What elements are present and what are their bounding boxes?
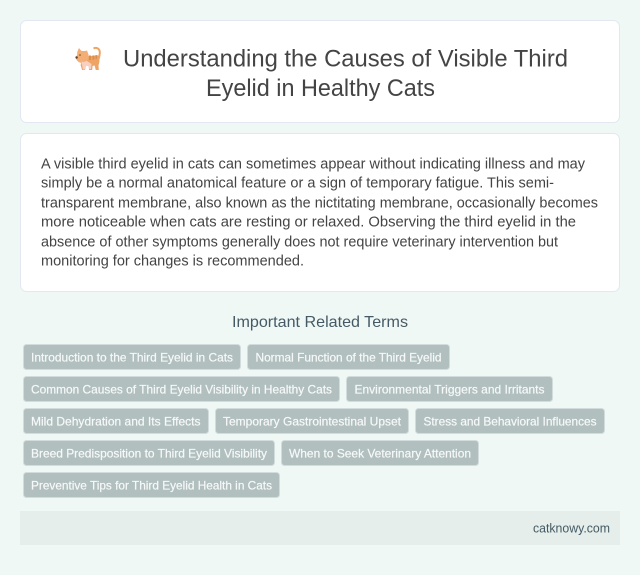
description paragraph: A visible third eyelid in cats can sometimes appear without indicating illness and may [41, 156, 586, 172]
tag: common causes: Common Causes of Third Eyelid Visibility in Healthy Cats [31, 383, 332, 397]
icon: orange cat [75, 48, 100, 70]
title text [123, 46, 568, 102]
description paragraph: simply be a normal anatomical feature or a sign of temporary fatigue. This semi- [41, 176, 554, 192]
tag: veterinary attention: When to Seek Veterinary Attention [289, 447, 471, 461]
heading: important related terms: Important Related Terms [232, 314, 408, 331]
panel: description card [20, 134, 620, 292]
tag: veterinary attention [282, 440, 478, 466]
panel: related term tags [24, 344, 604, 498]
description paragraph: monitoring for changes is recommended. [41, 254, 304, 270]
tag: breed predisposition: Breed Predisposition to Third Eyelid Visibility [31, 447, 267, 461]
tag: normal function: Normal Function of the Third Eyelid [256, 351, 442, 365]
tag: common causes [24, 376, 340, 402]
tag: breed predisposition [24, 440, 274, 466]
tag: normal function [248, 344, 450, 370]
description paragraph: transparent membrane, also known as the nictitating membrane, occasionally becomes [41, 195, 598, 211]
footer bar: catknowy.com [533, 522, 610, 536]
tag: preventive tips [24, 472, 280, 498]
tag: environmental triggers: Environmental Triggers and Irritants [354, 383, 544, 397]
tag: gastrointestinal upset [216, 408, 408, 434]
title text: Understanding the Causes of Visible Third [123, 46, 568, 73]
description paragraph: more noticeable when cats are resting or relaxed. Observing the third eyelid in the [41, 215, 576, 231]
description paragraph: absence of other symptoms generally does not require veterinary intervention but [41, 234, 558, 250]
panel: title card [20, 20, 620, 122]
description paragraph [41, 156, 598, 270]
title text: Eyelid in Healthy Cats [206, 75, 435, 102]
tag: gastrointestinal upset: Temporary Gastrointestinal Upset [223, 415, 402, 429]
tag: introduction [24, 344, 240, 370]
tag: mild dehydration: Mild Dehydration and Its Effects [31, 415, 200, 429]
tag: environmental triggers [346, 376, 552, 402]
tag: preventive tips: Preventive Tips for Third Eyelid Health in Cats [31, 479, 272, 493]
tag: mild dehydration [24, 408, 208, 434]
footer bar [20, 511, 620, 545]
tag: stress and behavior [416, 408, 604, 434]
tag: stress and behavior: Stress and Behavioral Influences [424, 415, 596, 429]
tag: introduction: Introduction to the Third Eyelid in Cats [31, 351, 233, 365]
